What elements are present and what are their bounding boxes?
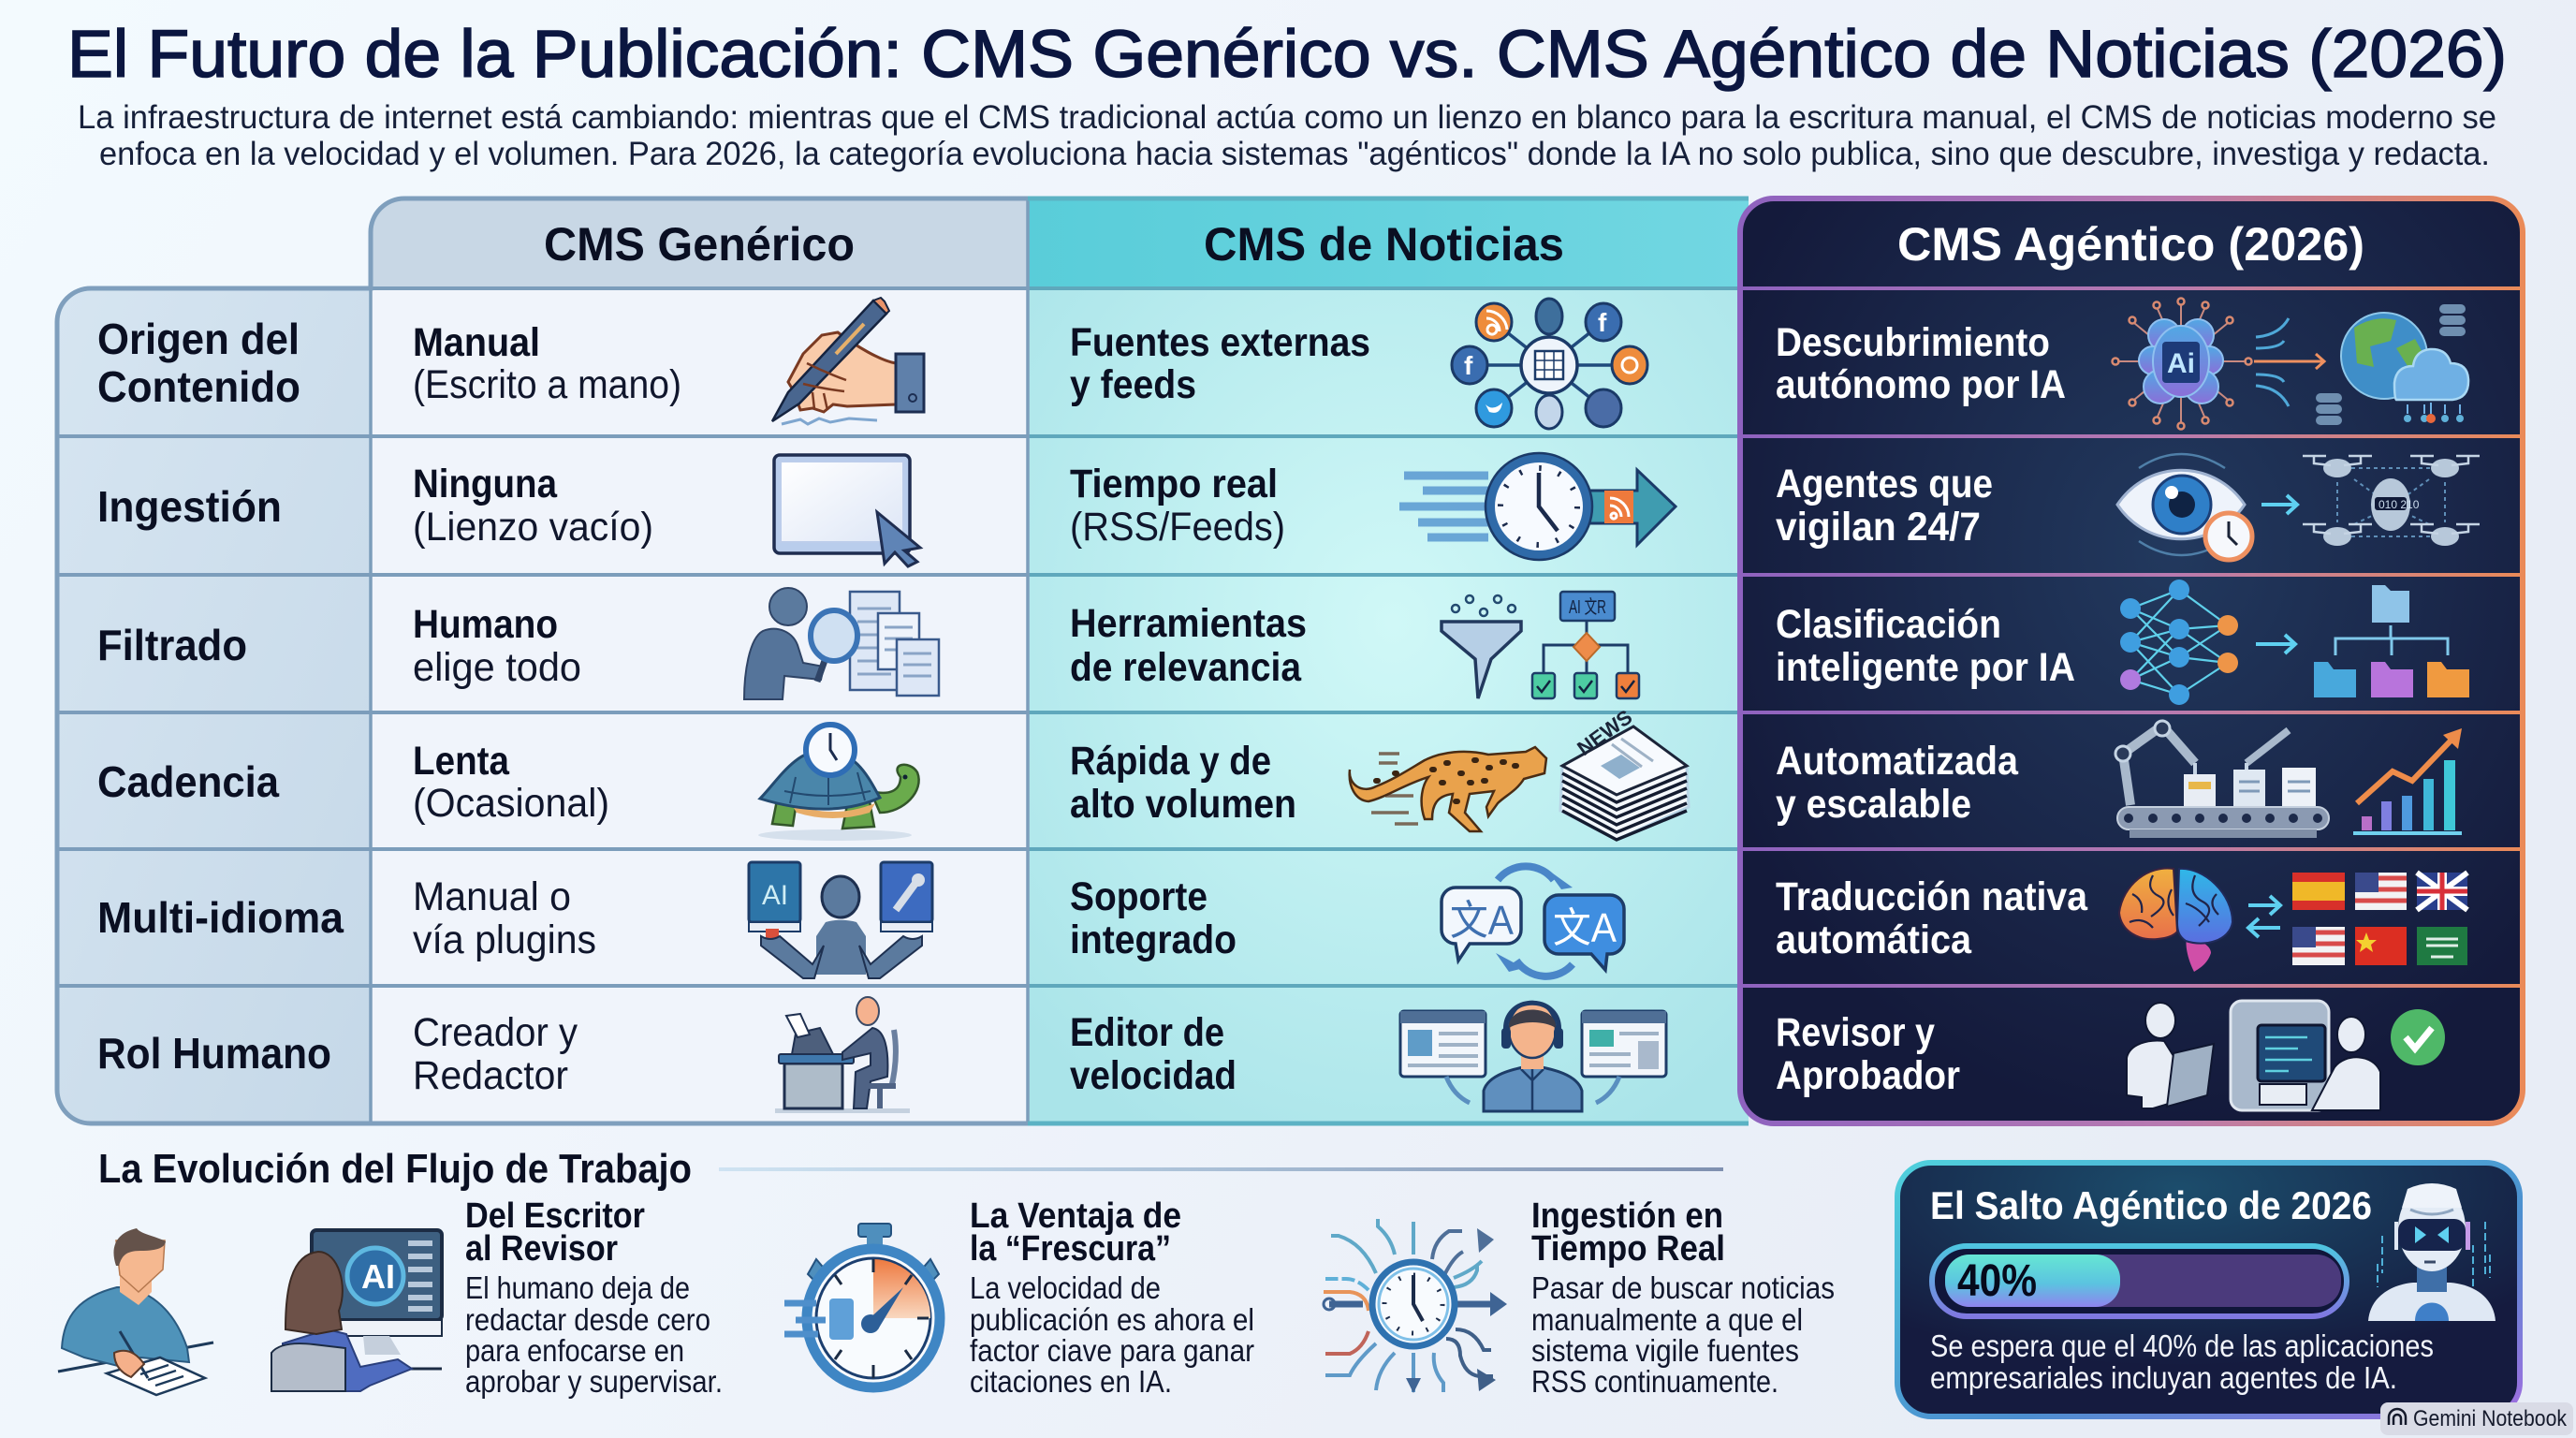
column cell text: vía plugins <box>413 917 596 962</box>
block text: La Ventaja de <box>970 1196 1181 1236</box>
column: CMS Genérico <box>413 218 939 1113</box>
panel: El Salto Agéntico de 2026 <box>1897 1163 2520 1416</box>
column cell text: Redactor <box>413 1053 568 1098</box>
panel description: Se espera que el 40% de las aplicaciones <box>1930 1328 2434 1363</box>
column cell text <box>1070 320 1370 1098</box>
icon: robot conveyor and growth chart <box>2115 721 2462 838</box>
block text: La velocidad de <box>970 1270 1161 1305</box>
panel: comparison table <box>57 198 2523 1123</box>
icon: person between AI and plugin books <box>749 862 932 978</box>
column cell text: Lenta <box>413 739 510 784</box>
heading: workflow evolution <box>98 1146 1723 1192</box>
row labels: Ingestión <box>97 482 282 531</box>
column cell text <box>1776 320 2088 1098</box>
title: El Futuro de la Publicación: CMS Genérico vs. CMS Agéntico de Noticias (2026) <box>67 18 2507 92</box>
column cell text: Manual <box>413 320 540 365</box>
icon: person between AI and plugin books: AI <box>762 880 788 911</box>
icon: AI robot <box>2368 1183 2496 1321</box>
icon: running cheetah <box>1350 747 1546 831</box>
block text: para enfocarse en <box>465 1333 684 1368</box>
subtitle: La infraestructura de internet está cambiando: mientras que el CMS tradicional actúa como un lienzo en blanco para la escritura manual, el CMS de noticias moderno se <box>78 99 2496 136</box>
icon: reviewer at AI monitor: AI <box>361 1257 395 1296</box>
icon: hand writing with pen <box>772 298 924 424</box>
progress bar: 40% <box>1932 1246 2347 1316</box>
block: Del Escritor al Revisor <box>58 1196 723 1399</box>
icon: clock with RSS arrow <box>1399 453 1676 560</box>
icon: turtle with clock <box>758 725 919 841</box>
column cell text: Aprobador <box>1776 1053 1960 1098</box>
column header: CMS Agéntico (2026) <box>1897 218 2364 271</box>
block text: RSS continuamente. <box>1531 1364 1778 1399</box>
block: La Ventaja de la Frescura <box>784 1196 1254 1399</box>
heading: workflow evolution: La Evolución del Flujo de Trabajo <box>98 1146 692 1192</box>
column cell text: Fuentes externas <box>1070 320 1370 365</box>
column cell text: autónomo por IA <box>1776 362 2066 407</box>
icon: feed hub: f <box>1598 308 1607 337</box>
icon: reviewer at AI monitor <box>271 1230 442 1391</box>
block text: Tiempo Real <box>1531 1229 1725 1269</box>
column cell text <box>413 320 681 1098</box>
column cell text: y escalable <box>1776 782 1971 827</box>
column cell text: Editor de <box>1070 1010 1224 1055</box>
icon: newspaper stack: NEWS <box>1573 705 1636 760</box>
block text: manualmente a que el <box>1531 1302 1803 1337</box>
column cell text: Clasificación <box>1776 602 2001 647</box>
block text: aprobar y supervisar. <box>465 1364 723 1399</box>
block: Ingestión en Tiempo Real <box>1324 1196 1835 1399</box>
block text: redactar desde cero <box>465 1302 710 1337</box>
column cell text: velocidad <box>1070 1053 1237 1098</box>
icon: brain and flags <box>2119 869 2467 972</box>
column cell text: vigilan 24/7 <box>1776 505 1981 550</box>
icon: eye and drones <box>2117 454 2480 560</box>
block text <box>970 1196 1254 1399</box>
column cell text: Ninguna <box>413 462 558 506</box>
icon: funnel and decision flow: AI 文R <box>1569 596 1606 618</box>
subtitle: enfoca en la velocidad y el volumen. Para 2026, la categoría evoluciona hacia sistemas "agénticos" donde la IA no solo publica, sino que descubre, investiga y redacta. <box>99 136 2490 172</box>
icon: speed editor with headset <box>1400 1002 1666 1111</box>
column cell text: Herramientas <box>1070 601 1307 646</box>
icon: feed hub: f <box>1464 351 1473 380</box>
badge: Gemini Notebook <box>2380 1402 2573 1435</box>
block text: factor ciave para ganar <box>970 1333 1254 1368</box>
column cell text: (Lienzo vacío) <box>413 505 653 550</box>
column cell text: Revisor y <box>1776 1010 1935 1055</box>
row labels: Multi-idioma <box>97 893 344 942</box>
panel description: empresariales incluyan agentes de IA. <box>1930 1360 2397 1395</box>
subtitle <box>78 99 2496 172</box>
column cell text: Creador y <box>413 1010 578 1055</box>
icon: person inspecting documents <box>744 588 939 699</box>
block text <box>1531 1196 1835 1399</box>
row labels: Cadencia <box>97 757 279 806</box>
column cell text: Automatizada <box>1776 739 2019 784</box>
block text: Ingestión en <box>1531 1196 1723 1236</box>
row labels: Contenido <box>97 362 300 411</box>
column cell text: (RSS/Feeds) <box>1070 505 1285 550</box>
icon: translation bubbles: 文A <box>1553 905 1617 951</box>
icon: neural network to folders <box>2120 580 2469 705</box>
panel description <box>1930 1328 2434 1395</box>
icon: writer at desk <box>58 1228 213 1395</box>
icon: clock with radiating feeds <box>1324 1219 1507 1393</box>
block text: al Revisor <box>465 1229 618 1269</box>
column cell text: de relevancia <box>1070 645 1302 690</box>
panel heading: El Salto Agéntico de 2026 <box>1930 1183 2372 1227</box>
block text: citaciones en IA. <box>970 1364 1172 1399</box>
table backgrounds and grid <box>57 198 1758 1123</box>
column cell text: y feeds <box>1070 362 1196 407</box>
column cell text: Agentes que <box>1776 462 1993 506</box>
column cell text: integrado <box>1070 917 1237 962</box>
icon: AI brain to globe and cloud: Ai <box>2167 348 2195 379</box>
block text <box>465 1196 723 1399</box>
icon: blank canvas with cursor <box>774 455 920 566</box>
column cell text: Rápida y de <box>1070 739 1271 784</box>
icon: AI brain to globe and cloud <box>2112 298 2468 429</box>
column header: CMS Genérico <box>544 218 855 271</box>
block text: la “Frescura” <box>970 1229 1171 1269</box>
progress bar: 40%: 40% <box>1957 1256 2037 1306</box>
row labels: Filtrado <box>97 621 247 669</box>
icon: reviewer with terminal and approval <box>2127 1001 2445 1110</box>
column cell text: Traducción nativa <box>1776 874 2088 919</box>
block text: Pasar de buscar noticias <box>1531 1270 1835 1305</box>
column cell text: automática <box>1776 917 1972 962</box>
block text: Del Escritor <box>465 1196 645 1236</box>
block text: publicación es ahora el <box>970 1302 1254 1337</box>
column cell text: inteligente por IA <box>1776 645 2075 690</box>
block text: sistema vigile fuentes <box>1531 1333 1799 1368</box>
icon: feed hub <box>1452 299 1647 429</box>
column background <box>1740 198 2523 1123</box>
icon: person typing at typewriter <box>775 997 910 1113</box>
column cell text: alto volumen <box>1070 782 1296 827</box>
block text: El humano deja de <box>465 1270 690 1305</box>
column: CMS Agéntico (2026) <box>1740 198 2523 1123</box>
row labels: Origen del <box>97 315 300 363</box>
column: CMS de Noticias <box>1070 218 1689 1111</box>
icon: translation bubbles <box>1442 866 1624 976</box>
row labels: Rol Humano <box>97 1029 331 1078</box>
column cell text: Humano <box>413 602 558 647</box>
column cell text: Tiempo real <box>1070 462 1278 506</box>
column cell text: elige todo <box>413 645 581 690</box>
icon: newspaper stack <box>1560 705 1689 840</box>
column cell text: Soporte <box>1070 874 1208 919</box>
row labels <box>97 315 344 1078</box>
column header: CMS de Noticias <box>1204 218 1564 271</box>
icon: translation bubbles: 文A <box>1450 898 1515 944</box>
column cell text: Descubrimiento <box>1776 320 2050 365</box>
icon: eye and drones: 010 210 <box>2378 498 2420 511</box>
icon: stopwatch <box>784 1224 940 1387</box>
column cell text: Manual o <box>413 874 571 919</box>
column cell text: (Ocasional) <box>413 781 609 826</box>
icon: funnel and decision flow <box>1442 592 1639 698</box>
column cell text: (Escrito a mano) <box>413 362 681 407</box>
